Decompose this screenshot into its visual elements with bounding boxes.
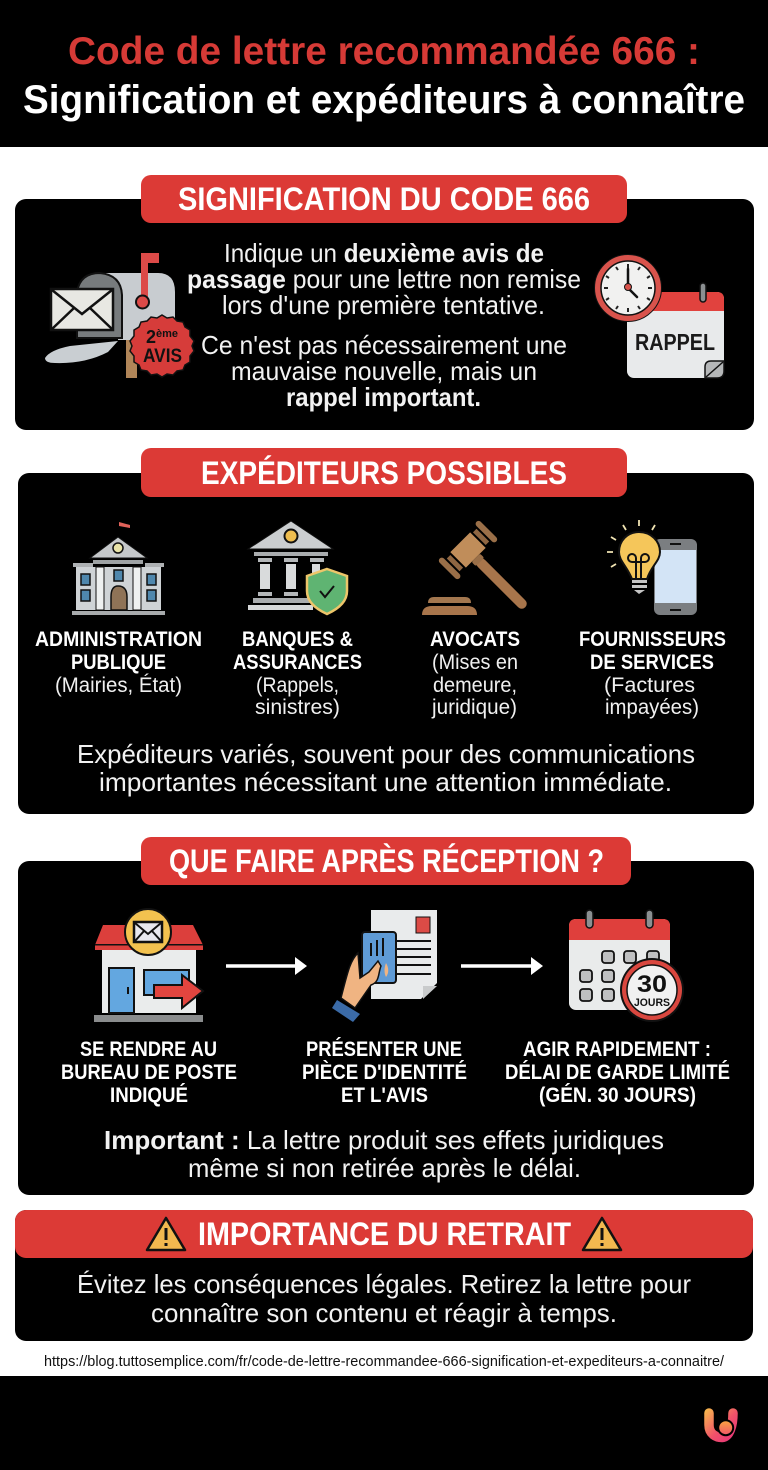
heading band [15, 1210, 753, 1258]
label: administration [35, 628, 202, 697]
heading pill: EXPÉDITEURS POSSIBLES [201, 455, 567, 491]
panel: importance du retrait [15, 1210, 753, 1341]
icon: clock and reminder calendar: RAPPEL [635, 329, 715, 355]
icon: warning left [147, 1218, 185, 1250]
label: fournisseurs: DE SERVICES [590, 651, 714, 674]
heading pill: QUE FAIRE APRÈS RÉCEPTION ? [169, 843, 604, 879]
text: meaning of the code: Indique un deuxième avis de [224, 238, 544, 268]
text: legal note: Important : La lettre produit ses effets juridiques [104, 1125, 664, 1155]
icon: document, hand and id card [332, 910, 437, 1022]
panel: signification [15, 175, 754, 430]
label: step 3: DÉLAI DE GARDE LIMITÉ [505, 1061, 730, 1084]
label: banques: BANQUES & [242, 628, 353, 651]
text: summary of senders: importantes nécessitant une attention immédiate. [99, 767, 672, 797]
label: banques: sinistres) [255, 696, 340, 719]
icon: mailbox with second notice badge: AVIS [143, 346, 182, 367]
text: legal note [104, 1125, 664, 1183]
icon: warning right [583, 1218, 621, 1250]
text: advice: connaître son contenu et réagir à temps. [151, 1298, 617, 1328]
icon: mailbox with second notice badge: ème [156, 328, 178, 340]
label: avocats [430, 628, 520, 719]
icon: calendar with 30 days badge [569, 910, 684, 1022]
icon: mailbox with second notice badge [45, 253, 194, 378]
text: meaning of the code: rappel important. [286, 382, 481, 412]
label: step 3: AGIR RAPIDEMENT : [523, 1038, 711, 1061]
heading pill [141, 448, 627, 497]
label: banques [233, 628, 362, 719]
label: step 1: SE RENDRE AU [80, 1038, 217, 1061]
text: advice: Évitez les conséquences légales. Retirez la lettre pour [77, 1269, 691, 1299]
label: banques: (Rappels, [256, 674, 339, 697]
icon: mailbox with second notice badge: 2 [146, 327, 156, 347]
label: fournisseurs [579, 628, 726, 719]
label: fournisseurs: FOURNISSEURS [579, 628, 726, 651]
label: step 1: BUREAU DE POSTE [61, 1061, 237, 1084]
heading band: IMPORTANCE DU RETRAIT [198, 1216, 571, 1252]
label: step 2: ET L'AVIS [341, 1084, 428, 1107]
text: summary of senders: Expéditeurs variés, souvent pour des communications [77, 739, 695, 769]
label: avocats: demeure, [433, 674, 517, 697]
text: meaning of the code [187, 238, 581, 412]
label: administration: (Mairies, État) [55, 674, 182, 697]
title line 2: Signification et expéditeurs à connaître [23, 78, 745, 122]
text: legal note: même si non retirée après le délai. [188, 1153, 581, 1183]
panel: que faire [18, 837, 754, 1195]
label: fournisseurs: impayées) [605, 696, 699, 719]
label: administration: PUBLIQUE [71, 651, 166, 674]
text: advice [77, 1269, 691, 1328]
label: step 1: INDIQUÉ [110, 1084, 188, 1107]
label: banques: ASSURANCES [233, 651, 362, 674]
label: step 1 [61, 1038, 237, 1107]
label: step 2: PIÈCE D'IDENTITÉ [302, 1061, 467, 1084]
panel: expéditeurs possibles [18, 448, 754, 814]
label: step 2: PRÉSENTER UNE [306, 1038, 462, 1061]
label: step 3 [505, 1038, 730, 1107]
arrow: step 2 to 3 [461, 957, 543, 975]
icon: gavel [422, 520, 546, 628]
header band [0, 0, 768, 147]
icon: clock and reminder calendar [594, 254, 724, 378]
label: administration: ADMINISTRATION [35, 628, 202, 651]
label: step 3: (GÉN. 30 JOURS) [539, 1084, 696, 1107]
icon: calendar with 30 days badge: 30 [637, 971, 667, 998]
label: step 2 [302, 1038, 467, 1107]
heading pill [141, 175, 627, 223]
title line 1: Code de lettre recommandée 666 : [68, 30, 700, 73]
text: meaning of the code: mauvaise nouvelle, mais un [231, 356, 537, 386]
heading pill [141, 837, 631, 885]
icon: brand logo [709, 1413, 733, 1438]
label: avocats: juridique) [431, 696, 517, 719]
label: avocats: (Mises en [432, 651, 518, 674]
icon: town hall [72, 522, 165, 615]
icon: calendar with 30 days badge: JOURS [634, 997, 670, 1009]
source url: https://blog.tuttosemplice.com/fr/code-de-lettre-recommandee-666-signification-et-expediteurs-a-connaitre/ [44, 1353, 725, 1370]
arrow: step 1 to 2 [226, 957, 307, 975]
text: meaning of the code: passage pour une lettre non remise [187, 264, 581, 294]
text: meaning of the code: Ce n'est pas nécessairement une [201, 330, 567, 360]
icon: light bulb and phone [607, 520, 697, 615]
icon: bank with shield [248, 521, 347, 614]
label: avocats: AVOCATS [430, 628, 520, 651]
text: summary of senders [77, 739, 695, 797]
footer band [0, 1376, 768, 1470]
label: fournisseurs: (Factures [604, 674, 695, 697]
heading pill: SIGNIFICATION DU CODE 666 [178, 181, 590, 217]
text: meaning of the code: lors d'une première tentative. [222, 290, 545, 320]
icon: post office [94, 909, 203, 1022]
